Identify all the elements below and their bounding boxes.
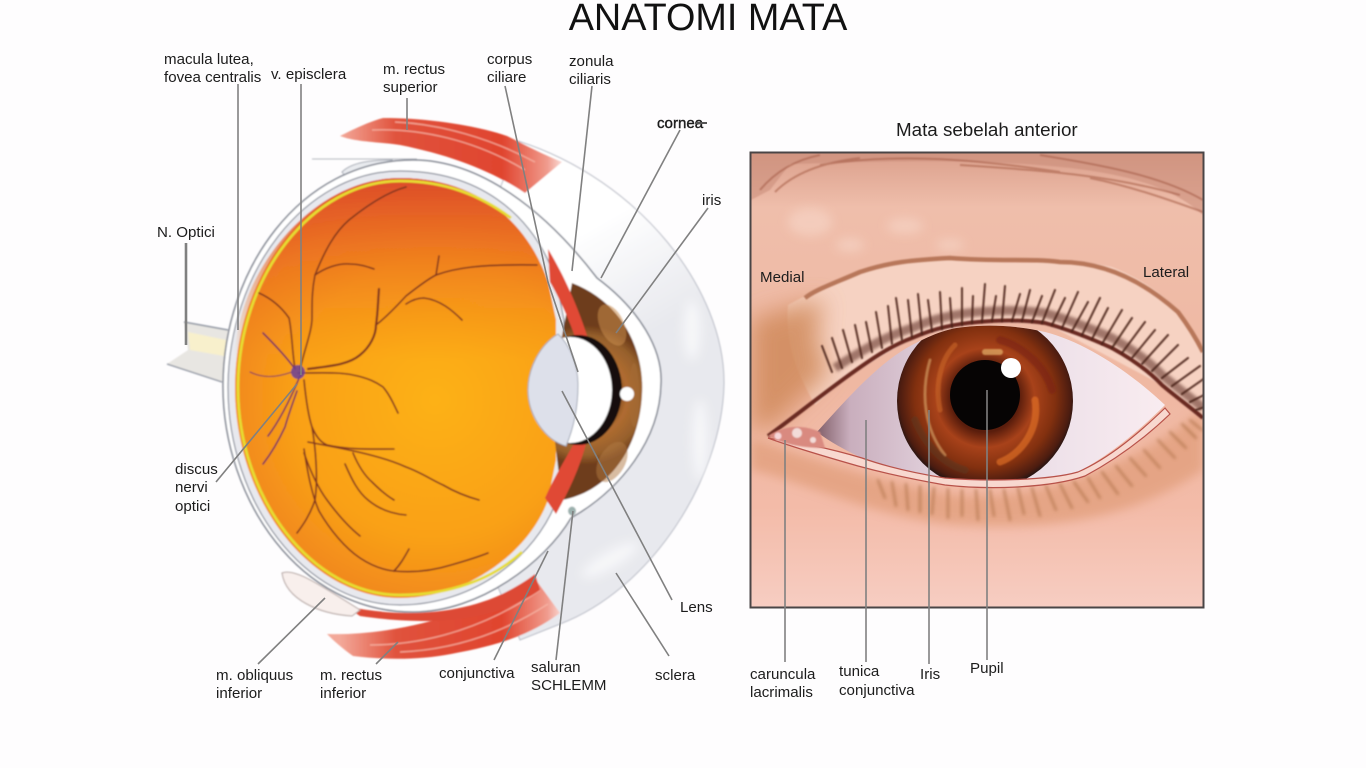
upper lashes: [822, 284, 1210, 410]
labels: cross-section: [157, 51, 721, 702]
leader lines: [186, 84, 987, 664]
labels: anterior view: Medial: [760, 269, 804, 286]
highlight: [1001, 358, 1021, 378]
lid crease shading: [805, 258, 1203, 352]
labels: cross-section: zonula: [569, 53, 614, 70]
labels: anterior view: tunica: [839, 663, 880, 680]
labels: anterior view: Mata sebelah anterior: [896, 119, 1078, 140]
labels: cross-section: ciliaris: [569, 71, 611, 88]
frame: [750, 152, 1204, 608]
labels: cross-section: ciliare: [487, 69, 526, 86]
tan inner orbit shadow: [751, 300, 830, 432]
pupil opening: [528, 337, 612, 443]
optic nerve: [167, 322, 228, 382]
labels: cross-section: fovea centralis: [164, 69, 261, 86]
red muscle strip under globe: [345, 574, 540, 621]
labels: anterior view: conjunctiva: [839, 682, 915, 699]
labels: cross-section: nervi: [175, 479, 208, 496]
labels: cross-section: m. rectus: [383, 61, 445, 78]
retina: [235, 178, 556, 598]
iris section: [550, 283, 642, 500]
labels: cross-section: saluran: [531, 659, 581, 676]
diagram: eye cross-section: [167, 118, 724, 659]
labels: cross-section: macula lutea,: [164, 51, 254, 68]
eyeball: [818, 326, 1165, 480]
retinal vessels: [250, 187, 537, 572]
lower lashes: [878, 420, 1202, 520]
labels: cross-section: m. obliquus: [216, 667, 293, 684]
lower lid rim: [768, 408, 1170, 488]
labels: cross-section: sclera: [655, 667, 696, 684]
labels: cross-section: inferior: [320, 685, 366, 702]
lens: [528, 334, 578, 446]
shell blotches: [578, 300, 708, 584]
pupil dark rim: [534, 335, 622, 445]
upper lid fold: [787, 259, 1203, 420]
labels: cross-section: Lens: [680, 599, 713, 616]
lash base shadow: [835, 311, 1203, 408]
labels: cross-section: SCHLEMM: [531, 677, 606, 694]
inferior oblique muscle: [282, 572, 360, 616]
labels: cross-section: N. Optici: [157, 224, 215, 241]
labels: cross-section: inferior: [216, 685, 262, 702]
labels: anterior view: Iris: [920, 666, 940, 683]
labels: anterior view: lacrimalis: [750, 684, 813, 701]
diagram: anterior eye: [751, 153, 1210, 607]
schlemm canal: [568, 506, 576, 516]
labels: anterior view: caruncula: [750, 666, 816, 683]
superior rectus muscle: [340, 118, 562, 193]
inferior rectus muscle: [327, 576, 560, 659]
ciliary body red: [545, 249, 590, 514]
labels: cross-section: m. rectus: [320, 667, 382, 684]
skin: [751, 153, 1203, 607]
skin pale blotches: [788, 208, 964, 252]
caruncle: [768, 427, 825, 448]
labels: anterior view: [750, 119, 1189, 701]
labels: cross-section: superior: [383, 79, 438, 96]
globe inner wall: [228, 171, 564, 605]
globe white wall and cornea: [223, 160, 661, 612]
labels: cross-section: cornea: [657, 115, 704, 132]
labels: cross-section: optici: [175, 498, 210, 515]
labels: cross-section: v. episclera: [271, 66, 347, 83]
labels: cross-section: iris: [702, 192, 721, 209]
labels: cross-section: corpus: [487, 51, 532, 68]
corneal reflex: [620, 387, 634, 401]
superior oblique tendon: [312, 159, 417, 182]
labels: anterior view: Lateral: [1143, 264, 1189, 281]
eye lower skin tint: [751, 410, 1203, 526]
labels: anterior view: Pupil: [970, 660, 1004, 677]
upper lid margin: [768, 321, 1203, 436]
yellow macular ring: [238, 181, 522, 595]
iris: [897, 326, 1073, 480]
sclera outer shell: [420, 141, 724, 640]
labels: cross-section: conjunctiva: [439, 665, 515, 682]
eyebrow: [751, 153, 1203, 215]
optic disc: [291, 365, 305, 379]
labels: cross-section: discus: [175, 461, 218, 478]
pupil: [950, 360, 1020, 430]
